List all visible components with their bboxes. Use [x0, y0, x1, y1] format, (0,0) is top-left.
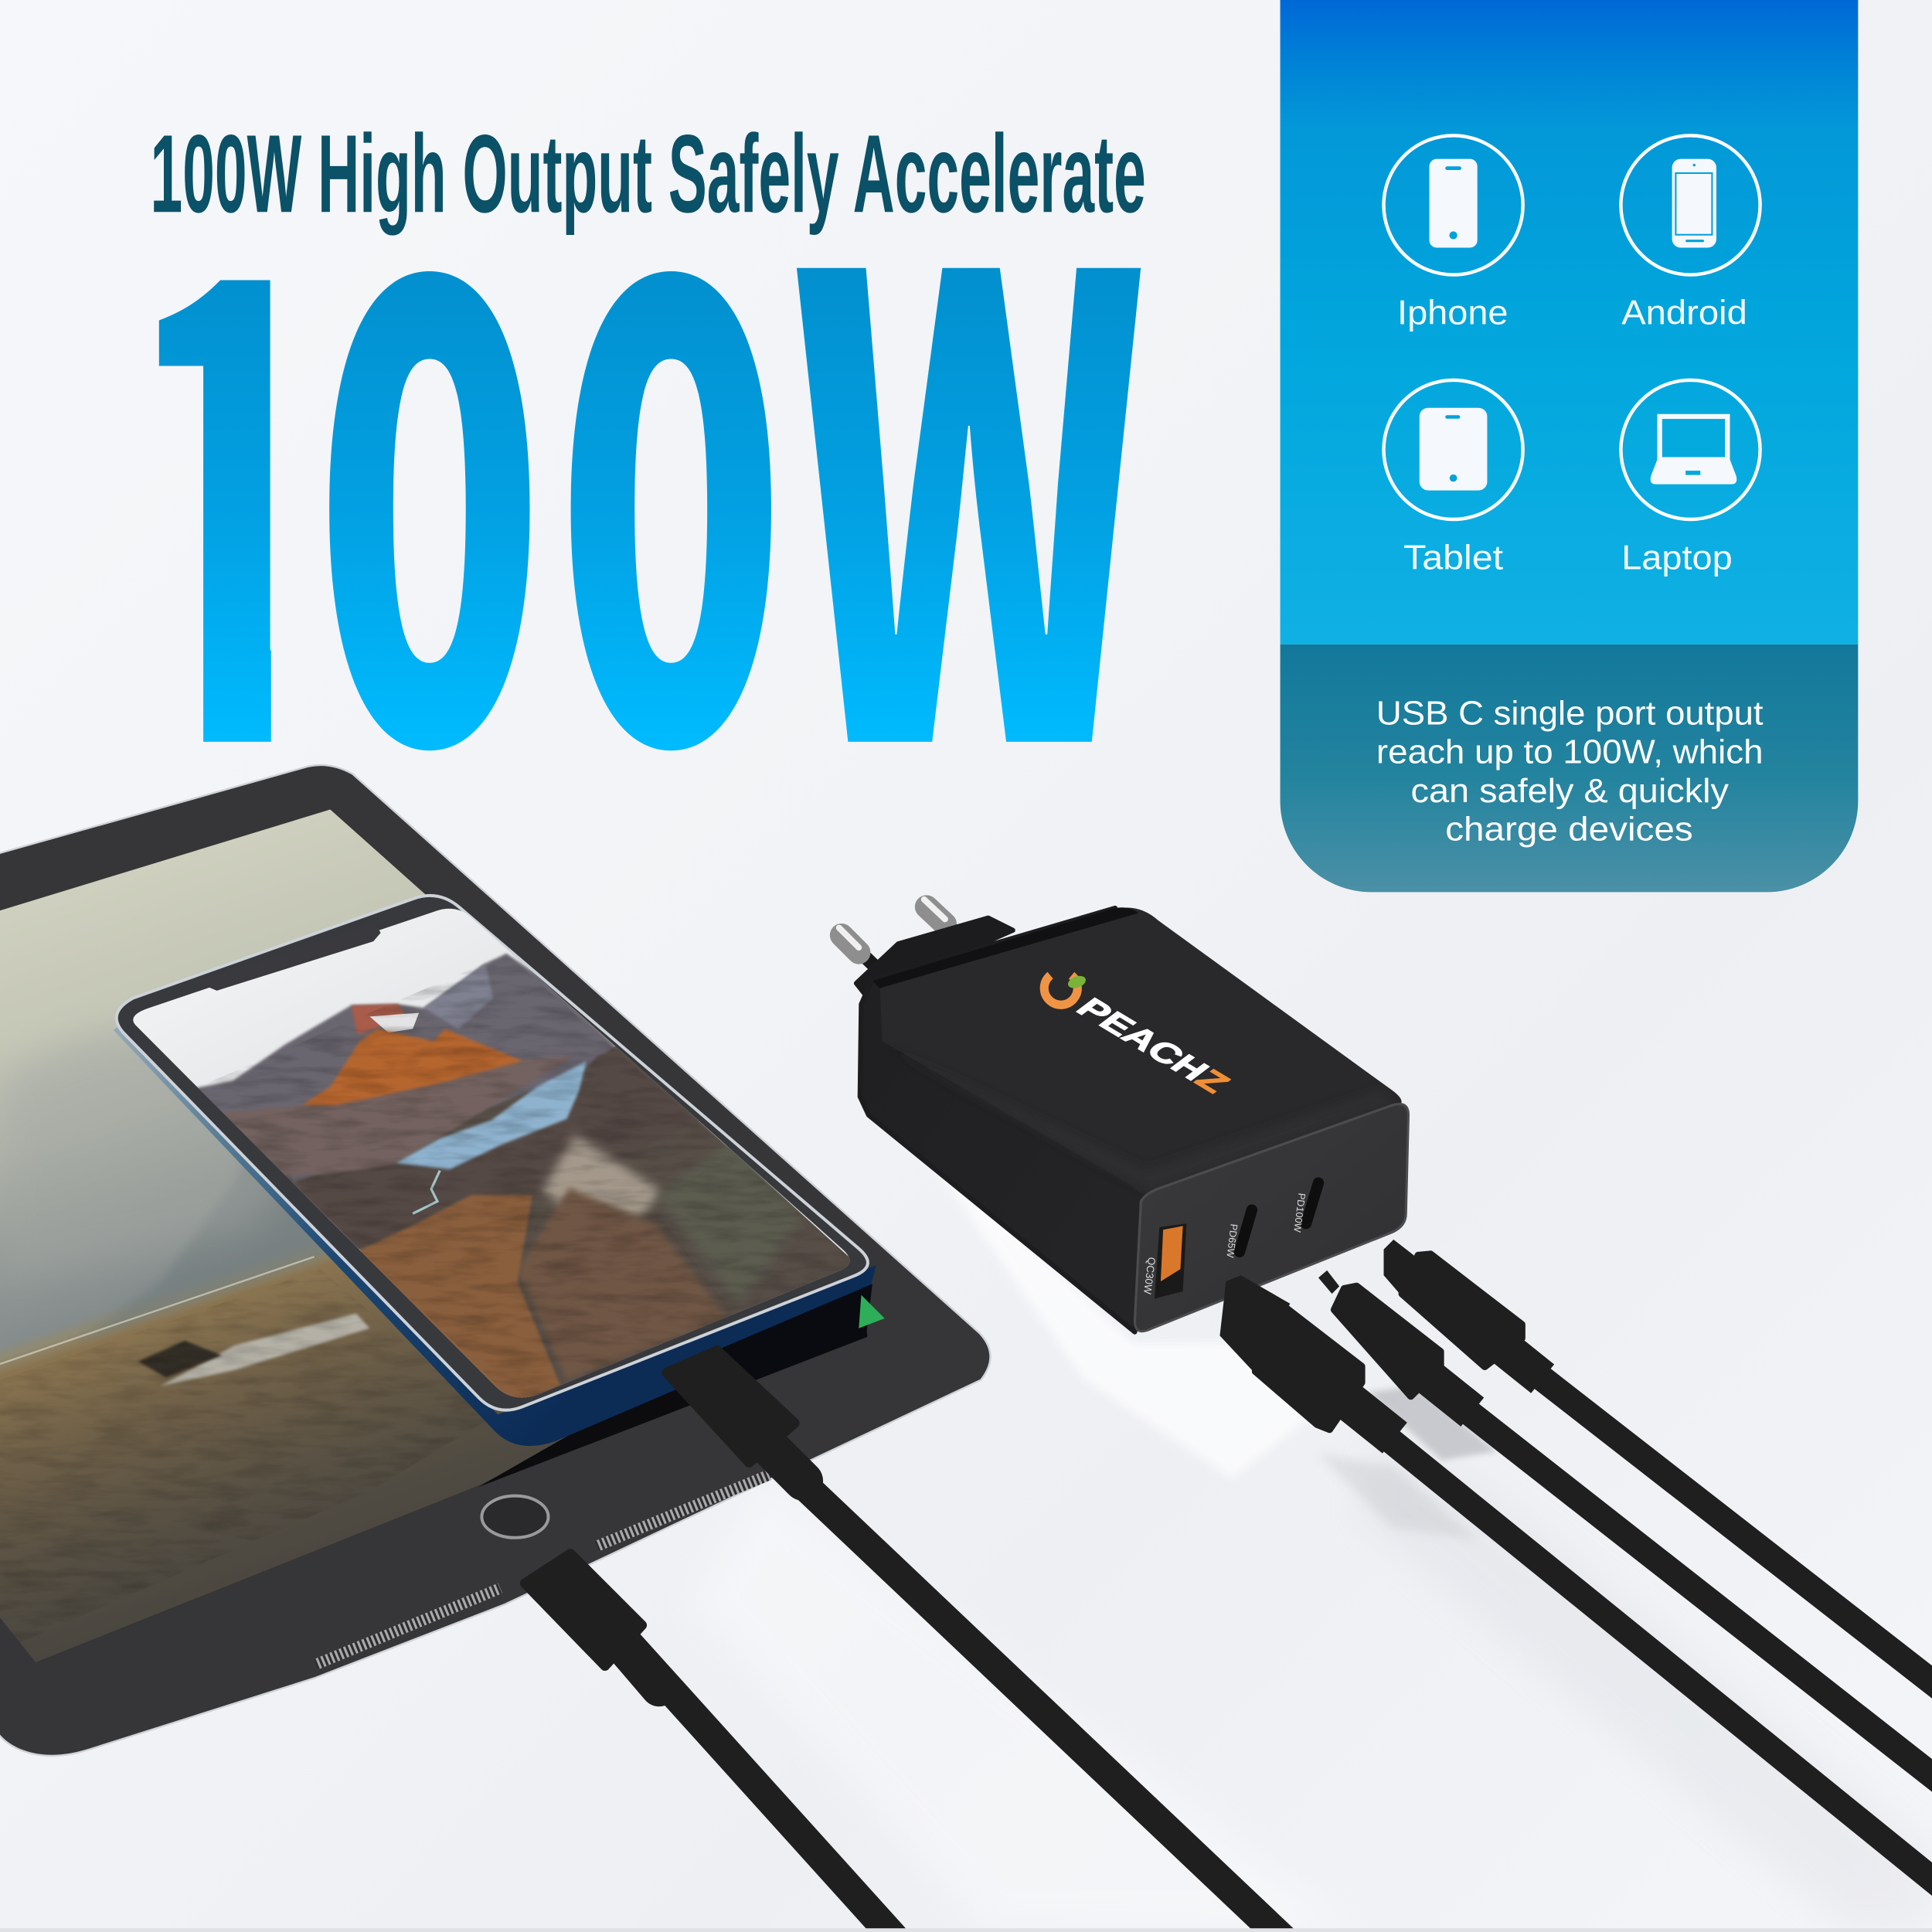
- panel description: can safely & quickly: [1411, 772, 1729, 810]
- lake: [396, 1061, 587, 1169]
- phone side edge: [114, 1022, 876, 1446]
- logo: peachz: [1037, 964, 1238, 1098]
- port: usb-c 65W: [1240, 1210, 1252, 1252]
- label: PD65W: PD65W: [1224, 1223, 1240, 1258]
- icon: android phone: [1621, 135, 1760, 275]
- label: Iphone: Iphone: [1397, 294, 1509, 332]
- orange sunlit ridge: [302, 1029, 522, 1105]
- panel: compatible devices: [1281, 0, 1858, 892]
- label: Tablet: Tablet: [1403, 539, 1504, 577]
- panel upper background: [1281, 0, 1858, 645]
- cable: usb-c right: [1383, 1240, 1932, 1713]
- cable: usb-a: [1219, 1275, 1932, 1911]
- tablet: [0, 765, 991, 1756]
- river: [413, 1171, 440, 1213]
- phone screen: [133, 909, 849, 1398]
- dark range below lake: [294, 1049, 699, 1250]
- label: Laptop: Laptop: [1621, 539, 1733, 577]
- body front face: [1134, 1104, 1408, 1332]
- body top face: [879, 908, 1402, 1194]
- label: PD100W: PD100W: [1291, 1192, 1308, 1233]
- icon: tablet: [1383, 380, 1523, 519]
- big 100W figure: 100W: [113, 5, 1147, 926]
- panel lower background: [1281, 645, 1858, 892]
- panel description: USB C single port output: [1376, 694, 1764, 732]
- bottom edge strip: [0, 1928, 1932, 1932]
- top face soft lower bevel: [887, 1047, 1393, 1190]
- body side: [860, 908, 1151, 1332]
- soft table shadows: [690, 1134, 1932, 1932]
- cable: usb-c middle: [1318, 1270, 1932, 1806]
- tablet home button: [481, 1496, 549, 1538]
- tablet screen scenery: [0, 1033, 493, 1651]
- charging arrow indicator: [859, 1295, 885, 1328]
- rock striations: [196, 954, 862, 1405]
- far purple range: [196, 954, 616, 1183]
- panel description: charge devices: [1445, 810, 1693, 848]
- panel description: [1376, 694, 1764, 848]
- orange-brown left slope: [354, 1196, 560, 1405]
- cable: tablet: [525, 1554, 930, 1932]
- plug base: [856, 918, 1013, 1001]
- green slope: [657, 1138, 801, 1306]
- tablet speaker grilles: [315, 1475, 769, 1665]
- black band under phone: [478, 1294, 867, 1487]
- lower valley base: [196, 1046, 862, 1405]
- port: usb-c 100W: [1306, 1183, 1318, 1223]
- label: Android: Android: [1621, 294, 1747, 332]
- tablet body: [0, 765, 991, 1756]
- icon: laptop: [1621, 380, 1760, 519]
- logo wordmark: PEACHZ: [1069, 992, 1238, 1098]
- lit cream ridge: [539, 1131, 662, 1219]
- plug pins: [839, 900, 968, 974]
- cable: phone: [667, 1350, 1314, 1932]
- logo mark: [1037, 964, 1084, 1012]
- brown central slope: [518, 1188, 727, 1380]
- body back collar: [872, 907, 1138, 988]
- label: QC30W: QC30W: [1141, 1257, 1158, 1295]
- port: usb-a: [1155, 1223, 1186, 1298]
- phone: [114, 896, 876, 1446]
- mid mountains: [222, 1056, 574, 1177]
- phone wallpaper: [196, 954, 862, 1405]
- tablet screen: [0, 810, 867, 1662]
- phone frame: [117, 896, 868, 1410]
- charger: [839, 900, 1408, 1332]
- icon: iphone: [1383, 135, 1523, 275]
- panel description: reach up to 100W, which: [1376, 733, 1764, 771]
- phone notch: [196, 923, 381, 991]
